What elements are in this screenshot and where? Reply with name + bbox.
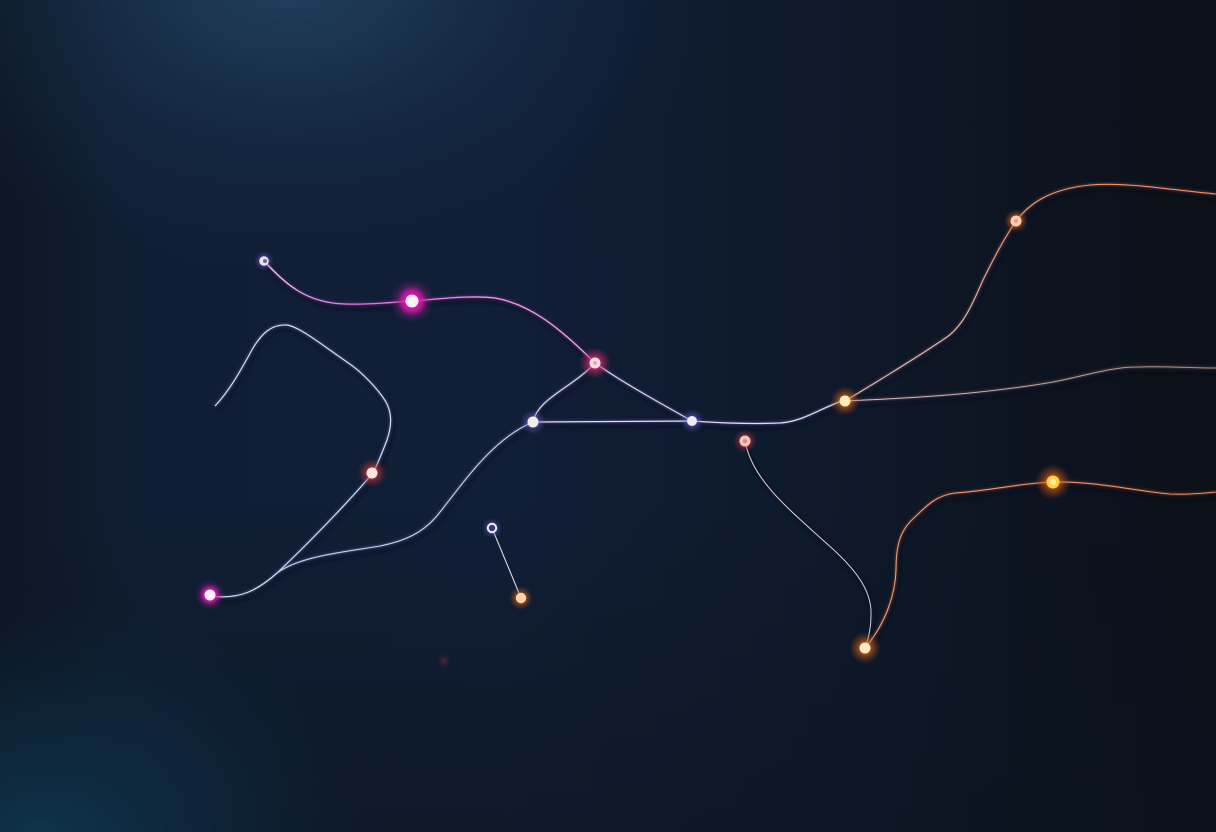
line: orange node up to top-right <box>845 184 1216 401</box>
node: red left <box>357 458 387 488</box>
node: top-left white <box>254 251 274 271</box>
node: ring small <box>482 518 502 538</box>
node: pink junction <box>579 347 611 379</box>
line shadows <box>212 188 1216 652</box>
line: top-left white node to magenta node to pink node <box>264 261 595 363</box>
line: triangle branches <box>533 363 692 422</box>
node: violet centre right <box>680 409 704 433</box>
node: amber right <box>1035 464 1071 500</box>
line: centre horizontal to orange node <box>533 400 845 423</box>
node: bottom orange <box>849 632 881 664</box>
node: orange junction <box>830 386 860 416</box>
line: orange node to right edge <box>845 367 1216 401</box>
node: red small <box>733 429 757 453</box>
node: magenta lower left <box>195 580 225 610</box>
node: violet centre left <box>520 409 546 435</box>
line: white hook through red node to magenta node <box>210 325 391 597</box>
node: orange small <box>509 586 533 610</box>
line: red node to bottom orange node <box>745 441 871 648</box>
line: branch from lower left to centre node <box>277 422 533 573</box>
node: large magenta <box>390 279 434 323</box>
node: top-right orange <box>1004 209 1028 233</box>
line: short segment <box>492 528 521 598</box>
node: faint dim <box>436 653 452 669</box>
line: bottom orange node to right edge through amber node <box>865 482 1216 648</box>
line glow halo <box>210 184 1216 648</box>
